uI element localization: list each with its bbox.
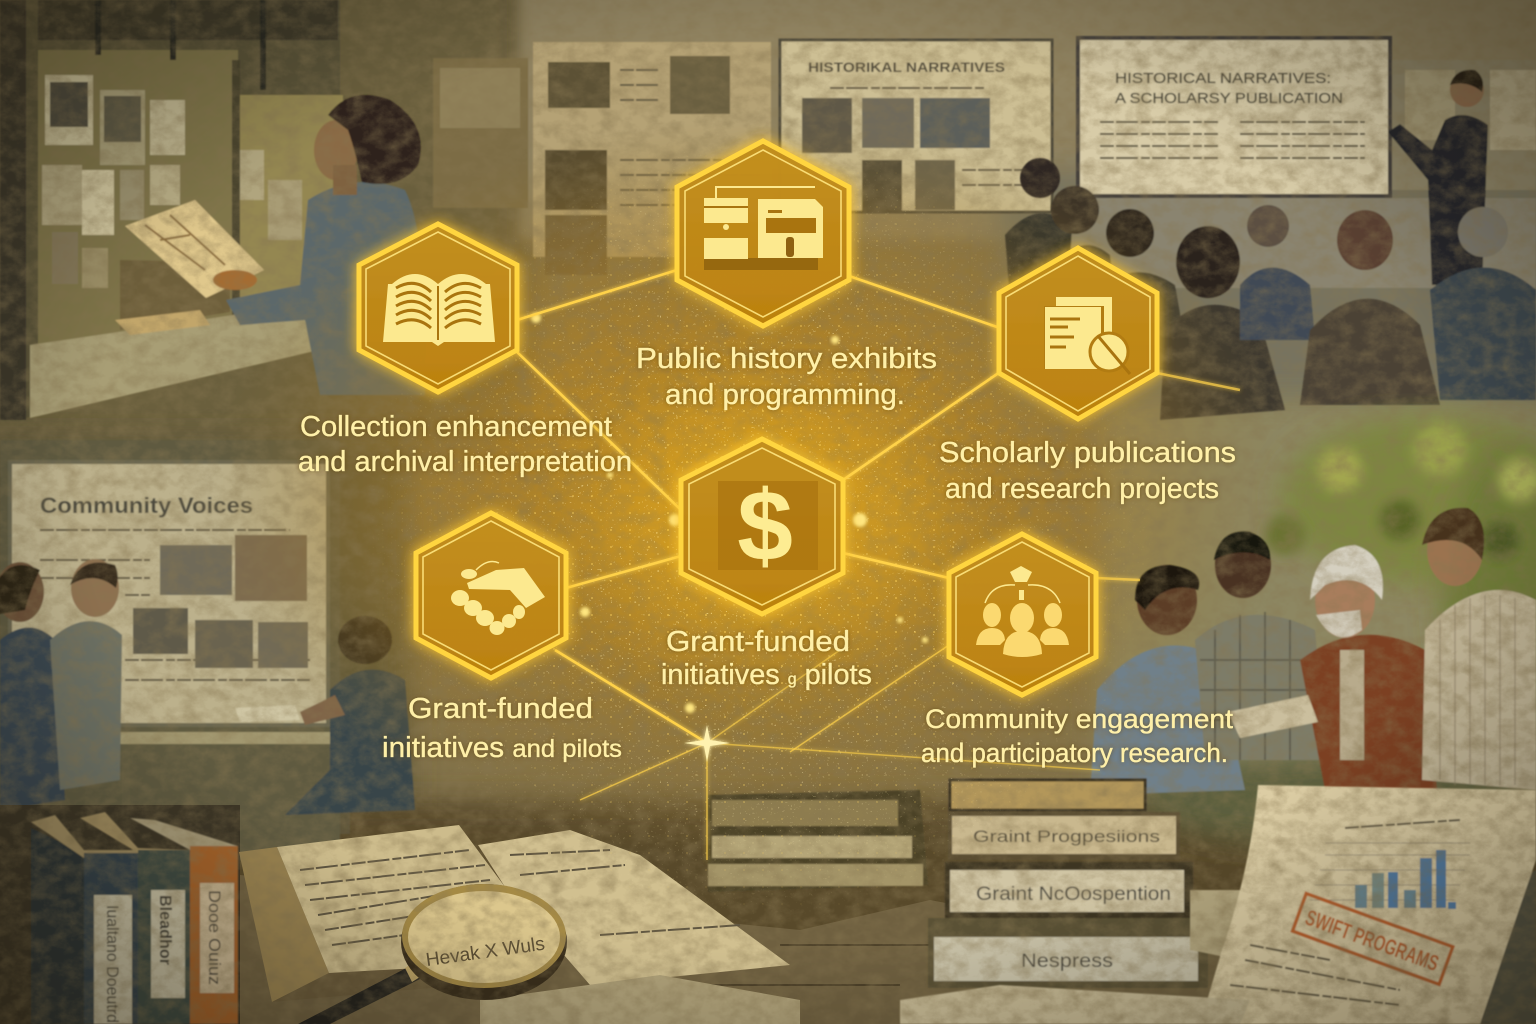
label: collection enhancement: Collection enhancement <box>300 411 612 443</box>
label: scholarly publications <box>939 437 1236 505</box>
icon: open book <box>383 274 495 346</box>
seated woman <box>285 616 415 815</box>
hexagon: exhibits, archive icon <box>677 141 849 326</box>
network star point <box>684 725 730 762</box>
foreground: binders: Bleadhor <box>156 895 175 965</box>
man in striped shirt <box>1422 508 1536 790</box>
foreground: binders <box>31 812 238 1024</box>
scene: wall posters and exhibition board <box>433 40 1052 275</box>
magnifying glass <box>298 884 567 1024</box>
label: scholarly publications: and research projects <box>945 473 1219 505</box>
screen title: HISTORICAL NARRATIVES: <box>1115 70 1331 87</box>
presenter <box>1388 70 1488 285</box>
two visitors <box>0 559 122 810</box>
label: public history: Public history exhibits <box>636 343 937 375</box>
gold overlay <box>242 143 1241 826</box>
scene: lecture screen and audience <box>1005 38 1536 420</box>
label: collection enhancement <box>298 411 632 478</box>
scene: lecture screen and audience: A SCHOLARSY PUBLICATION <box>1115 90 1343 107</box>
label: collection enhancement: and archival interpretation <box>298 446 632 478</box>
audience <box>1005 158 1536 420</box>
hexagon: grant funding, dollar icon <box>681 439 843 614</box>
man in plaid <box>1195 532 1325 760</box>
hexagon: scholarly, document icon <box>999 248 1157 419</box>
foreground: open book <box>239 825 800 1024</box>
label: public history: and programming. <box>665 379 905 411</box>
icon: handshake <box>451 562 545 635</box>
connector lines <box>517 270 1240 860</box>
icon: document and magnifier <box>1044 297 1130 374</box>
background wash <box>240 0 1536 930</box>
label: community engagement: and participatory research. <box>921 738 1228 768</box>
label: left grant-funded: initiatives and pilots <box>382 732 622 764</box>
icon: drawers and document <box>704 187 823 270</box>
foreground: labelled binder stack: Nespress <box>1021 951 1113 972</box>
binder spine text: Graint Progpesiions <box>973 827 1160 846</box>
scene: community voices poster <box>0 440 415 860</box>
researcher figure <box>226 95 426 395</box>
bar chart <box>1310 843 1470 909</box>
label: public history <box>636 343 937 411</box>
stamp: SWIFT PROGRAMS <box>1302 905 1442 976</box>
foreground: wooden table <box>0 805 1536 1024</box>
label: left grant-funded <box>382 693 622 764</box>
foreground: labelled binder stack <box>928 780 1208 988</box>
scene: community group outdoors <box>1090 415 1536 845</box>
hexagon: community, people icon <box>949 534 1096 695</box>
woman in denim <box>1090 565 1245 795</box>
label: community engagement <box>921 704 1234 768</box>
foreground: labelled binder stack: Graint NcOospention <box>976 884 1171 905</box>
label: center grant-funded <box>661 626 872 691</box>
stamp <box>1293 893 1453 984</box>
scene: display case with researcher <box>0 0 426 420</box>
label: scholarly publications: Scholarly publications <box>939 437 1236 469</box>
chart held by researcher <box>125 200 264 298</box>
foreground: report with chart and stamp <box>900 785 1536 1024</box>
icon: group of people <box>976 566 1069 657</box>
label: left grant-funded: Grant-funded <box>408 693 593 725</box>
hexagon: collection, book icon <box>359 224 517 392</box>
label: center grant-funded: Grant-funded <box>666 626 850 658</box>
elder in rust jacket <box>1300 545 1437 790</box>
hexagon: grants, handshake icon <box>416 513 566 678</box>
magnifying glass: Hevak X Wuls <box>424 934 546 971</box>
poster heading: Community Voices <box>40 493 253 518</box>
icon: dollar sign: $ <box>737 470 793 582</box>
foreground: stack of books <box>708 790 928 892</box>
label: community engagement: Community engagement <box>925 704 1234 734</box>
foreground: binders: Dooe Ouiuz <box>205 890 224 985</box>
label: center grant-funded: initiatives g pilots <box>661 659 872 691</box>
poster title: HISTORIKAL NARRATIVES <box>808 59 1005 75</box>
